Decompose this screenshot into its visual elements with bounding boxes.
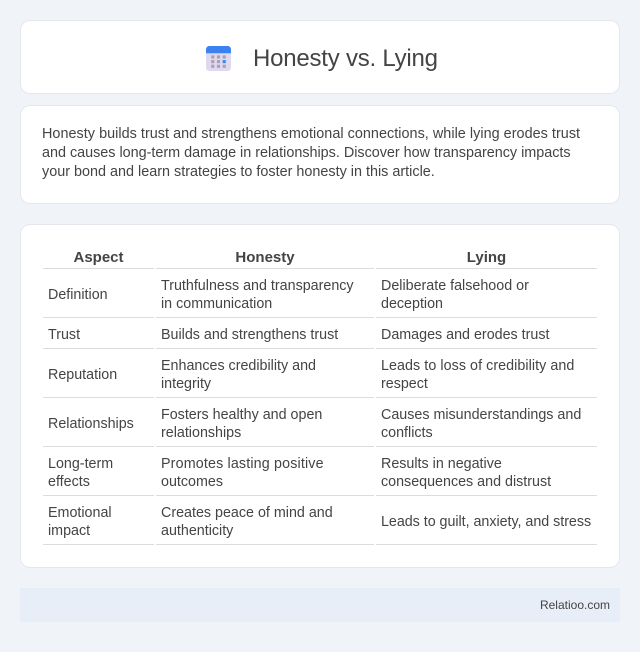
- intro text: your bond and learn strategies to foster honesty in this article.: [42, 164, 435, 180]
- row: reputation: integrity: [161, 376, 211, 392]
- row: definition: Truthfulness and transparency: [161, 278, 354, 294]
- row: definition: Deliberate falsehood or: [381, 278, 529, 294]
- row: relationships: relationships: [161, 425, 241, 441]
- row: long-term effects: Long-term: [48, 456, 113, 472]
- table header: [73, 249, 506, 266]
- table header: Honesty: [235, 249, 295, 266]
- intro text: [42, 126, 580, 180]
- row: reputation: [48, 358, 574, 392]
- row: long-term effects: consequences and distrust: [381, 474, 551, 490]
- row: relationships: conflicts: [381, 425, 433, 441]
- panel: comparison table: [20, 224, 620, 568]
- row: definition: [48, 278, 529, 312]
- row: relationships: [48, 407, 581, 441]
- row: long-term effects: [48, 456, 551, 490]
- row: emotional impact: [48, 505, 591, 539]
- row: long-term effects: Promotes lasting positive: [161, 456, 324, 472]
- row: definition: deception: [381, 296, 443, 312]
- table header: Aspect: [73, 249, 124, 266]
- row: emotional impact: impact: [48, 523, 90, 539]
- row: emotional impact: Creates peace of mind and: [161, 505, 333, 521]
- row: long-term effects: effects: [48, 474, 90, 490]
- row: emotional impact: Leads to guilt, anxiety, and stress: [381, 514, 591, 530]
- panel: introduction: [20, 105, 620, 204]
- panel: title card: [20, 20, 620, 94]
- row: emotional impact: Emotional: [48, 505, 112, 521]
- row: trust: Trust: [48, 327, 80, 343]
- row: relationships: Relationships: [48, 416, 134, 432]
- intro text: and causes long-term damage in relationships. Discover how transparency impacts: [42, 145, 571, 161]
- row: trust: [48, 327, 550, 343]
- row: definition: Definition: [48, 287, 108, 303]
- table header: Lying: [467, 249, 506, 266]
- row: reputation: Reputation: [48, 367, 117, 383]
- row: emotional impact: authenticity: [161, 523, 233, 539]
- icon: calendar: [206, 46, 231, 71]
- row: trust: Damages and erodes trust: [381, 327, 549, 343]
- row: long-term effects: outcomes: [161, 474, 223, 490]
- row: relationships: Causes misunderstandings and: [381, 407, 581, 423]
- row: reputation: Leads to loss of credibility and: [381, 358, 574, 374]
- footer bar: [20, 588, 620, 622]
- footer credit: Relatioo.com: [540, 598, 610, 612]
- row: long-term effects: Results in negative: [381, 456, 502, 472]
- row: reputation: respect: [381, 376, 428, 392]
- title: Honesty vs. Lying: [253, 45, 438, 72]
- row: trust: Builds and strengthens trust: [161, 327, 338, 343]
- row: definition: in communication: [161, 296, 272, 312]
- row: relationships: Fosters healthy and open: [161, 407, 322, 423]
- intro text: Honesty builds trust and strengthens emotional connections, while lying erodes trust: [42, 126, 580, 142]
- row: reputation: Enhances credibility and: [161, 358, 316, 374]
